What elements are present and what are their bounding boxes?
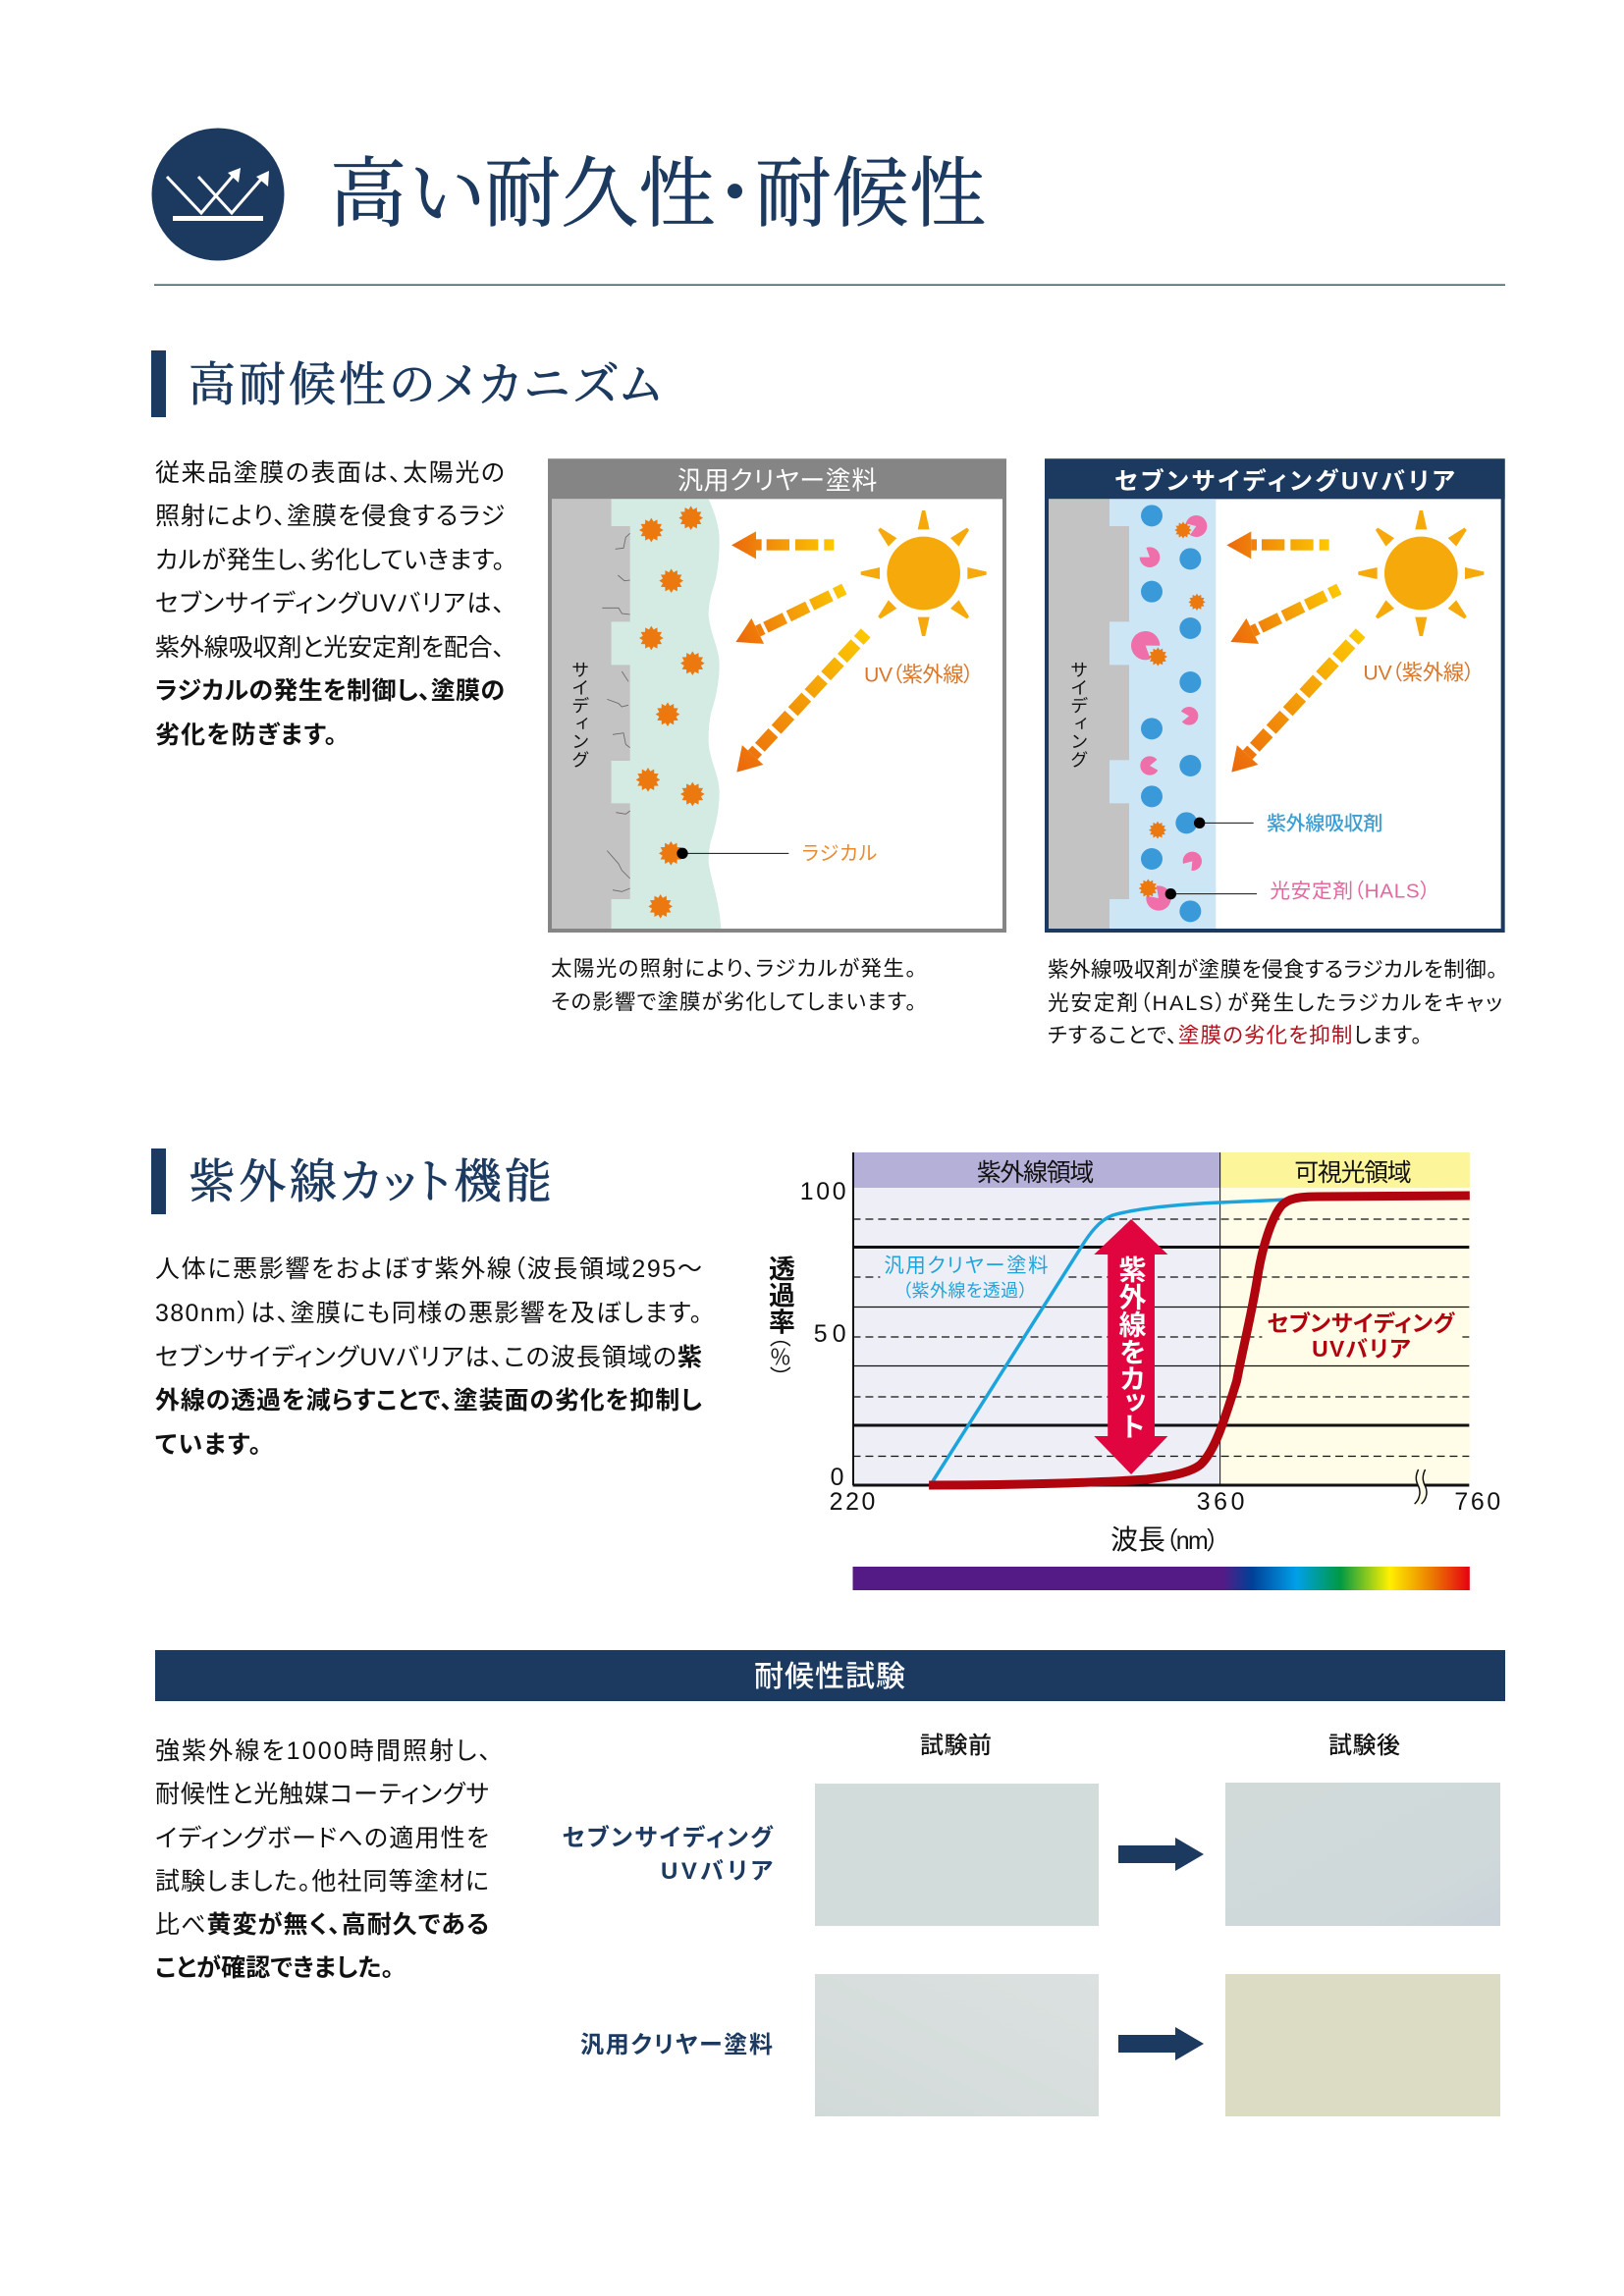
caption: UV barrier: 光安定剤（HALS）が発生したラジカルをキャッ <box>1048 991 1502 1015</box>
curve label: UV barrier: セブンサイディング <box>1267 1310 1456 1336</box>
callout: HALS <box>1165 881 1431 903</box>
row label: generic clear: 汎用クリヤー塗料 <box>580 2032 773 2058</box>
axis break mark <box>1415 1469 1427 1504</box>
text block: mechanism description: 劣化を防ぎます。 <box>155 721 337 749</box>
curve label: UV barrier: UVバリア <box>1312 1336 1411 1362</box>
coat layer <box>1110 499 1216 929</box>
text block: UV cut description: ています。 <box>155 1431 261 1459</box>
callout: HALS: 光安定剤（HALS） <box>1270 881 1431 903</box>
arrow: UV diagonal long <box>1221 623 1371 782</box>
label: UV: UV（紫外線） <box>864 663 974 686</box>
row label: UV barrier <box>562 1824 774 1885</box>
curve label: generic clear: 汎用クリヤー塗料 <box>884 1255 1049 1277</box>
text block: weather test description: 試験しました。他社同等塗材に <box>155 1868 489 1896</box>
x axis title: （nm） <box>1165 1527 1219 1555</box>
spectrum bar <box>853 1567 1470 1590</box>
text block: mechanism description: カルが発生し、劣化していきます。 <box>155 547 505 574</box>
column heading: after: 試験後 <box>1328 1733 1400 1759</box>
sample: generic clear after <box>1225 1974 1500 2116</box>
curve label: generic clear: （紫外線を透過） <box>902 1281 1028 1301</box>
text block: mechanism description: セブンサイディングUVバリアは、 <box>155 590 505 617</box>
y axis title: （％） <box>767 1336 791 1377</box>
y axis values <box>800 1178 846 1491</box>
radical particles <box>636 506 705 919</box>
row label: UV barrier: UVバリア <box>661 1858 773 1885</box>
arrow: UV barrier result <box>1118 1838 1204 1871</box>
curve label: generic clear <box>884 1255 1049 1301</box>
region header: UV <box>853 1152 1220 1188</box>
text block: weather test description: 耐候性と光触媒コーティングサ <box>155 1781 489 1808</box>
arrow: UV diagonal long <box>727 623 876 782</box>
arrow: UV diagonal short <box>730 576 850 655</box>
text block: UV cut description <box>155 1255 702 1459</box>
text block: UV cut description: 380nm）は、塗膜にも同様の悪影響を及ぼします。 <box>155 1300 702 1327</box>
UV absorber particles <box>1141 505 1201 922</box>
label: siding: サイディング <box>1068 661 1089 769</box>
text block: mechanism description: 紫外線吸収剤と光安定剤を配合、 <box>155 634 505 662</box>
x axis values: 220 <box>830 1488 875 1516</box>
callout: UV absorber <box>1194 812 1382 834</box>
callout: UV absorber: 紫外線吸収剤 <box>1267 812 1382 834</box>
sample: UV barrier after <box>1225 1783 1500 1926</box>
text block: weather test description: ことが確認できました。 <box>155 1953 394 1982</box>
title: 高い耐久性・耐候性 <box>330 133 986 242</box>
text block: weather test description: 比べ黄変が無く、高耐久である <box>155 1910 489 1939</box>
text block: mechanism description: ラジカルの発生を制御し、塗膜の <box>155 677 505 705</box>
caption: generic clear coat: 太陽光の照射により、ラジカルが発生。 <box>551 957 916 981</box>
panel heading: セブンサイディングUVバリア <box>1114 467 1455 496</box>
caption: UV barrier: 紫外線吸収剤が塗膜を侵食するラジカルを制御。 <box>1048 958 1497 982</box>
y axis values: 100 <box>800 1178 846 1205</box>
x axis title: 波長 <box>1110 1524 1165 1555</box>
arrow: UV horizontal <box>731 531 834 559</box>
icon: weather durability badge <box>151 128 285 261</box>
arrow label: 紫外線をカット <box>1116 1255 1147 1439</box>
panel heading: 汎用クリヤー塗料 <box>677 466 877 496</box>
y axis title <box>765 1255 794 1377</box>
heading: mechanism: 高耐候性のメカニズム <box>189 347 661 414</box>
caption: generic clear coat: その影響で塗膜が劣化してしまいます。 <box>551 990 916 1014</box>
y axis values: 50 <box>814 1320 846 1348</box>
radical particles <box>1139 521 1206 898</box>
x axis values <box>830 1488 1500 1516</box>
caption: UV barrier <box>1048 958 1502 1047</box>
curve: UV barrier <box>929 1196 1470 1485</box>
panel: generic clear coat diagram <box>548 458 1006 931</box>
caption: generic clear coat <box>551 957 916 1014</box>
text block: weather test description: 強紫外線を1000時間照射し、 <box>155 1737 491 1765</box>
text block: mechanism description <box>155 459 505 749</box>
sample: UV barrier before <box>815 1784 1099 1926</box>
x axis values: 760 <box>1454 1488 1500 1516</box>
text block: weather test description <box>155 1737 491 1982</box>
arrow: UV cut span <box>1094 1219 1167 1474</box>
callout: radical: ラジカル <box>802 843 878 865</box>
banner: weather test: 耐候性試験 <box>754 1661 905 1693</box>
sample: generic clear before <box>815 1974 1099 2116</box>
region header: UV: 紫外線領域 <box>977 1159 1094 1187</box>
text block: mechanism description: 従来品塗膜の表面は、太陽光の <box>155 459 505 487</box>
callout: radical <box>677 843 878 865</box>
region header: visible <box>1220 1152 1470 1188</box>
siding layer <box>1049 499 1129 929</box>
curve: generic clear <box>931 1200 1288 1484</box>
sun <box>1358 510 1484 636</box>
coat layer <box>612 499 721 929</box>
text block: weather test description: イディングボードへの適用性を <box>155 1825 489 1852</box>
text block: UV cut description: 人体に悪影響をおよぼす紫外線（波長領域295～ <box>155 1255 702 1283</box>
arrow: generic clear result <box>1118 2027 1204 2060</box>
heading: UV cut: 紫外線カット機能 <box>189 1144 552 1211</box>
text block: UV cut description: 外線の透過を減らすことで、塗装面の劣化を抑制し <box>155 1387 702 1415</box>
row label: UV barrier: セブンサイディング <box>562 1824 774 1851</box>
title rule <box>154 285 1505 286</box>
sun <box>861 510 987 636</box>
caption: UV barrier: チすることで、塗膜の劣化を抑制します。 <box>1048 1024 1422 1047</box>
banner: weather test <box>155 1650 1505 1701</box>
cracks <box>602 533 630 891</box>
x axis title <box>1110 1524 1219 1555</box>
y axis values: 0 <box>831 1464 843 1491</box>
text block: UV cut description: セブンサイディングUVバリアは、この波長領域の紫 <box>155 1344 702 1371</box>
HALS particles <box>1125 512 1210 916</box>
label: UV: UV（紫外線） <box>1363 661 1475 684</box>
y axis title: 透過率 <box>765 1255 794 1335</box>
label masks <box>880 1254 1063 1304</box>
arrow: UV diagonal short <box>1224 576 1345 655</box>
label: siding: サイディング <box>569 661 590 769</box>
text block: mechanism description: 照射により、塗膜を侵食するラジ <box>155 503 505 530</box>
siding layer <box>552 499 630 929</box>
x axis values: 360 <box>1197 1488 1245 1516</box>
column heading: before: 試験前 <box>920 1733 992 1759</box>
curve label: UV barrier <box>1267 1310 1456 1362</box>
region header: visible: 可視光領域 <box>1294 1159 1412 1187</box>
panel: UV barrier diagram <box>1045 458 1505 931</box>
arrow: UV horizontal <box>1226 531 1329 559</box>
chart: transmittance by wavelength <box>765 1152 1500 1590</box>
